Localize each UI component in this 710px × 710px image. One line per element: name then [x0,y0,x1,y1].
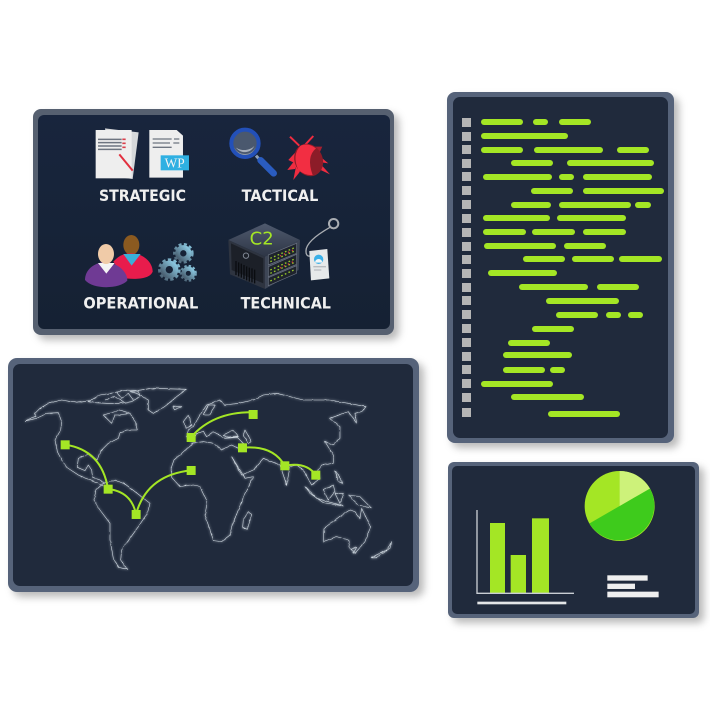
icon: strategic documents: WP [165,156,185,171]
heading: technical: TECHNICAL [241,293,331,312]
icon: people [85,235,153,287]
icon: C2 server: C2 [250,228,274,249]
heading: operational: OPERATIONAL [83,293,198,312]
heading: tactical: TACTICAL [242,186,318,205]
panel: charts [448,462,699,618]
world map outline [25,388,392,569]
islands [305,470,372,508]
icon: magnifier [231,130,274,173]
africa [172,444,253,542]
line number markers [462,118,471,417]
code lines [481,119,664,417]
south america [94,480,150,569]
eurasia [187,393,367,485]
pie chart [585,471,655,541]
icon: gears [159,244,196,281]
bar chart [477,510,574,604]
panel: intelligence types [33,109,394,335]
icon: bug [287,136,330,181]
route nodes [61,410,320,519]
heading: strategic: STRATEGIC [99,186,186,205]
icon: strategic documents [96,128,189,179]
greenland [130,388,187,413]
attack route curves [65,412,316,514]
north america [25,400,137,486]
panel: code listing [447,92,674,443]
new zealand [372,542,392,557]
panel: world map [8,358,419,592]
icon: phishing hook and badge [306,219,338,280]
icon: C2 server [228,223,300,289]
legend bars [607,575,659,597]
australia [323,508,371,553]
